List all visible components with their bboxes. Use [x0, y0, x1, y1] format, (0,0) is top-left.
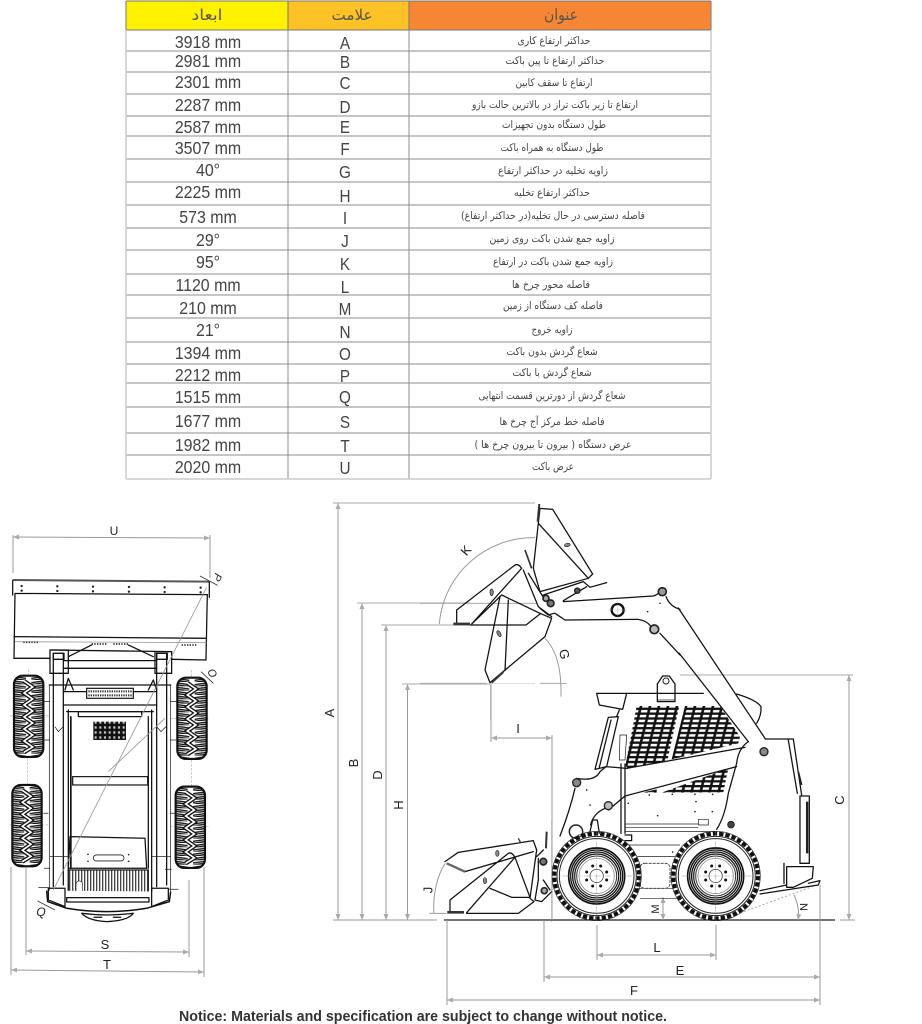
body panels [560, 608, 820, 898]
column: titles: زاویه تخلیه در حداکثر ارتفاع [498, 165, 608, 177]
arc G [545, 638, 573, 697]
column: titles: زاویه خروج [532, 324, 572, 336]
column: dimensions: 573 mm [179, 207, 237, 227]
column: titles: زاویه جمع شدن باکت در ارتفاع [493, 256, 613, 268]
column: symbols: N [339, 322, 351, 342]
label O: O [204, 667, 219, 681]
column: symbols: L [341, 277, 349, 297]
column: symbols: P [340, 366, 350, 386]
column: dimensions: 2225 mm [175, 182, 241, 202]
specification table [126, 1, 711, 479]
dimension U [13, 524, 210, 578]
bucket linkage [523, 570, 580, 617]
column: dimensions: 2287 mm [175, 95, 241, 115]
dimension M [650, 897, 663, 920]
table header: عنوان [544, 5, 578, 25]
dimension L: L [653, 940, 661, 955]
arc K [439, 538, 535, 624]
hood [68, 837, 147, 868]
column: dimensions: 2301 mm [175, 72, 241, 92]
dimension H: H [391, 800, 406, 810]
height dimensions [322, 503, 855, 920]
column: dimensions: 2020 mm [175, 457, 241, 477]
column: dimensions [175, 32, 241, 477]
column: symbols: T [340, 436, 350, 456]
dimension E: E [676, 963, 685, 978]
column: dimensions: 3918 mm [175, 32, 241, 52]
arc G: G [556, 648, 573, 660]
table grid [126, 30, 711, 479]
arc K: K [457, 542, 475, 559]
label P: P [210, 572, 224, 583]
column: dimensions: 2587 mm [175, 117, 241, 137]
column: symbols: E [340, 117, 350, 137]
column: symbols: H [339, 186, 351, 206]
cab grilles [625, 706, 740, 793]
column: dimensions: 40° [196, 160, 220, 180]
column: dimensions: 29° [196, 230, 220, 250]
roof and hook [597, 676, 703, 709]
column: dimensions: 95° [196, 252, 220, 272]
column: symbols: C [339, 73, 351, 93]
column: titles: عرض دستگاه ( بیرون تا بیرون چرخ ها ) [474, 438, 632, 451]
dimension N: N [797, 903, 809, 911]
column: titles: فاصله محور چرخ ها [512, 279, 590, 291]
column: symbols: D [339, 97, 351, 117]
column: symbols: M [339, 299, 351, 319]
column: titles: حداکثر ارتفاع کاری [518, 35, 590, 47]
column: dimensions: 2212 mm [175, 365, 241, 385]
front wheel [552, 831, 642, 921]
bucket: rolled back [453, 565, 540, 625]
dimension L [597, 925, 716, 960]
column: titles: طول دستگاه به همراه باکت [500, 141, 604, 154]
dimension F: F [630, 983, 638, 998]
column: dimensions: 3507 mm [175, 138, 241, 158]
column: symbols: I [343, 208, 347, 228]
table header [126, 1, 711, 30]
table outer edges [126, 30, 711, 479]
column: dimensions: 1515 mm [175, 387, 241, 407]
column: dimensions: 210 mm [179, 298, 237, 318]
column: dimensions: 1677 mm [175, 411, 241, 431]
column: titles: زاویه جمع شدن باکت روی زمین [490, 233, 614, 245]
column: symbols: O [339, 344, 351, 364]
tires [12, 676, 207, 868]
lowered bucket [421, 820, 552, 922]
bucket [13, 580, 209, 660]
arc J: J [421, 887, 436, 893]
column: titles: فاصله دسترسی در حال تخلیه(در حداکثر ارتفاع) [461, 210, 645, 222]
dimension U: U [110, 524, 118, 538]
column: symbols: K [340, 254, 350, 274]
dimension B: B [346, 759, 361, 767]
rear wheel [671, 831, 761, 921]
column: symbols: A [340, 33, 351, 53]
bucket: tilted down [485, 597, 552, 683]
top view drawing [9, 524, 224, 977]
top view machine [9, 576, 218, 922]
column: titles: ارتفاع تا زیر باکت تراز در بالاترین حالت بازو [471, 99, 638, 111]
column: symbols: F [340, 139, 350, 159]
turning radius lines [38, 576, 218, 910]
dimension F [447, 885, 820, 1005]
dimension T [11, 867, 204, 977]
rear bumper [47, 891, 171, 912]
dimension I: I [516, 721, 520, 736]
column: symbols: J [341, 231, 349, 251]
dimension N [740, 885, 817, 920]
dimension A: A [322, 708, 337, 717]
dimension S: S [101, 937, 110, 952]
lift arm [555, 588, 680, 655]
column: titles: حداکثر ارتفاع تا پین باکت [506, 55, 604, 67]
reference lines [420, 603, 567, 720]
column: symbols: U [339, 458, 351, 478]
axle centre lines [9, 669, 210, 827]
bucket: fully dumped [525, 504, 607, 601]
column: titles: حداکثر ارتفاع تخلیه [514, 187, 590, 199]
label Q: Q [36, 905, 46, 919]
column: titles: شعاع گردش از دورترین قسمت انتهایی [478, 389, 626, 402]
dimension D: D [370, 770, 385, 780]
dotted centre line [550, 820, 553, 922]
column: titles: طول دستگاه بدون تجهیزات [502, 118, 606, 131]
ground line [444, 919, 835, 921]
column: titles: شعاع گردش با باکت [512, 366, 592, 379]
dimension I [491, 684, 552, 920]
table header: ابعاد [192, 6, 222, 24]
chassis and lift arms [33, 645, 187, 922]
column: dimensions: 1394 mm [175, 343, 241, 363]
column: dimensions: 1120 mm [175, 275, 241, 295]
bucket linkage [535, 832, 552, 902]
dimension M: M [650, 904, 662, 914]
table header: علامت [332, 6, 372, 24]
side view drawing [322, 503, 855, 1005]
column: dimensions: 21° [196, 320, 220, 340]
column: symbols [339, 33, 351, 478]
column: symbols: Q [339, 387, 351, 407]
raised lift arm and buckets [420, 504, 680, 720]
column: symbols: G [339, 162, 351, 182]
column: dimensions: 1982 mm [175, 435, 241, 455]
column: titles: فاصله کف دستگاه از زمین [503, 299, 603, 312]
door and handrail [595, 710, 619, 769]
column: titles [461, 35, 645, 473]
column: titles: فاصله خط مرکز آج چرخ ها [500, 415, 604, 428]
column: titles: ارتفاع تا سقف کابین [516, 77, 592, 89]
radiator [68, 870, 148, 897]
column: titles: عرض باکت [532, 461, 574, 473]
dimension S [26, 867, 189, 957]
loader body [552, 608, 820, 921]
column: titles: شعاع گردش بدون باکت [506, 345, 598, 358]
dimension C: C [832, 795, 847, 805]
dotted line [492, 683, 535, 685]
bucket shell [445, 838, 537, 913]
column: symbols: S [340, 412, 350, 432]
column: symbols: B [340, 52, 350, 72]
column: dimensions: 2981 mm [175, 51, 241, 71]
dimension T: T [103, 957, 111, 972]
